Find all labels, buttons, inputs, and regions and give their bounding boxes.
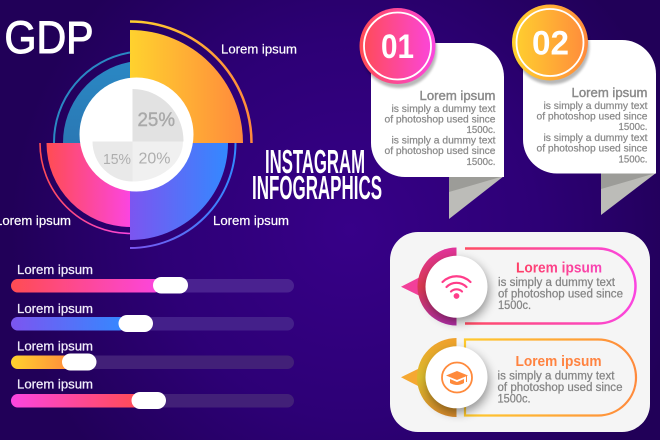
segment: orange quadrant bbox=[130, 22, 252, 143]
item text: of photoshop used since bbox=[498, 288, 623, 300]
card text: Lorem ipsum bbox=[420, 88, 496, 103]
bar 3 bbox=[11, 338, 294, 370]
inner pie: 20% slice bbox=[132, 142, 183, 182]
heading: Instagram Infographics: INSTAGRAM bbox=[265, 143, 365, 180]
icon: wifi bbox=[442, 276, 470, 298]
card text: is simply a dummy text bbox=[392, 134, 496, 146]
card text: of photoshop used since bbox=[536, 110, 648, 122]
segment: pink quadrant bbox=[40, 143, 130, 234]
item text: is simply a dummy text bbox=[498, 370, 615, 382]
half ring with pointer bbox=[401, 338, 456, 417]
label: 25%: 25% bbox=[138, 110, 175, 131]
card text: is simply a dummy text bbox=[544, 100, 648, 112]
inner pie: 15% slice bbox=[92, 142, 132, 182]
item text: 1500c. bbox=[498, 394, 530, 406]
icon disc bbox=[427, 351, 489, 413]
bar 3: Lorem ipsum bbox=[17, 338, 93, 354]
callout card 02 bbox=[512, 4, 656, 215]
outline pill bbox=[465, 248, 636, 324]
radial pie chart bbox=[40, 22, 252, 248]
card text: of photoshop used since bbox=[384, 114, 496, 126]
bar 2 bbox=[11, 301, 294, 332]
title: GDP: GDP bbox=[4, 12, 94, 63]
panel: feature list bbox=[390, 232, 650, 432]
bar 2: Lorem ipsum bbox=[17, 301, 93, 316]
item text: Lorem ipsum bbox=[516, 260, 602, 276]
card text: 1500c. bbox=[466, 124, 496, 136]
segment: blue quadrant bbox=[130, 143, 236, 248]
bar 1 bbox=[11, 262, 294, 294]
item text bbox=[498, 353, 622, 406]
item text: of photoshop used since bbox=[498, 382, 622, 394]
inner white disc bbox=[80, 78, 194, 192]
card text: Lorem ipsum bbox=[572, 85, 648, 100]
item text: 1500c. bbox=[498, 300, 531, 312]
label: 20%: 20% bbox=[138, 150, 171, 168]
card text bbox=[384, 88, 496, 168]
bar 4: Lorem ipsum bbox=[17, 376, 93, 392]
card text: is simply a dummy text bbox=[392, 103, 496, 115]
number badge: 02 bbox=[532, 24, 569, 62]
segment: teal quadrant bbox=[54, 52, 130, 143]
card text: 1500c. bbox=[466, 156, 496, 168]
ribbon tail bbox=[601, 173, 656, 215]
card text: of photoshop used since bbox=[536, 142, 648, 154]
item text bbox=[498, 260, 623, 312]
bar 1: Lorem ipsum bbox=[17, 262, 93, 277]
card text bbox=[536, 85, 648, 166]
panel background bbox=[390, 232, 650, 432]
chart label: top right: Lorem ipsum bbox=[221, 42, 297, 56]
ribbon tail bbox=[449, 176, 504, 219]
card text: 1500c. bbox=[618, 121, 648, 133]
card text: is simply a dummy text bbox=[544, 132, 648, 144]
heading: Instagram Infographics: INFOGRAPHICS bbox=[252, 169, 382, 206]
card text: of photoshop used since bbox=[384, 145, 496, 157]
card body bbox=[523, 40, 656, 174]
inner pie: 25% slice bbox=[132, 89, 184, 142]
callout card 01 bbox=[360, 8, 504, 219]
item text: Lorem ipsum bbox=[516, 353, 602, 370]
card text: 1500c. bbox=[618, 154, 648, 166]
chart label: bottom right: Lorem ipsum bbox=[213, 213, 289, 228]
bar 4 bbox=[11, 376, 294, 409]
icon: graduation cap bbox=[442, 362, 472, 392]
number badge bbox=[360, 8, 437, 88]
progress bars bbox=[11, 262, 294, 409]
item text: is simply a dummy text bbox=[498, 277, 616, 289]
number badge: 01 bbox=[381, 28, 414, 66]
item: graduation bbox=[401, 338, 636, 417]
heading: Instagram Infographics bbox=[252, 143, 382, 206]
outline pill bbox=[465, 340, 636, 416]
icon disc bbox=[427, 260, 489, 322]
half ring with pointer bbox=[401, 248, 456, 326]
label: 15%: 15% bbox=[103, 152, 131, 168]
item: wifi bbox=[401, 248, 636, 326]
number badge bbox=[512, 4, 590, 84]
card body bbox=[371, 43, 504, 177]
